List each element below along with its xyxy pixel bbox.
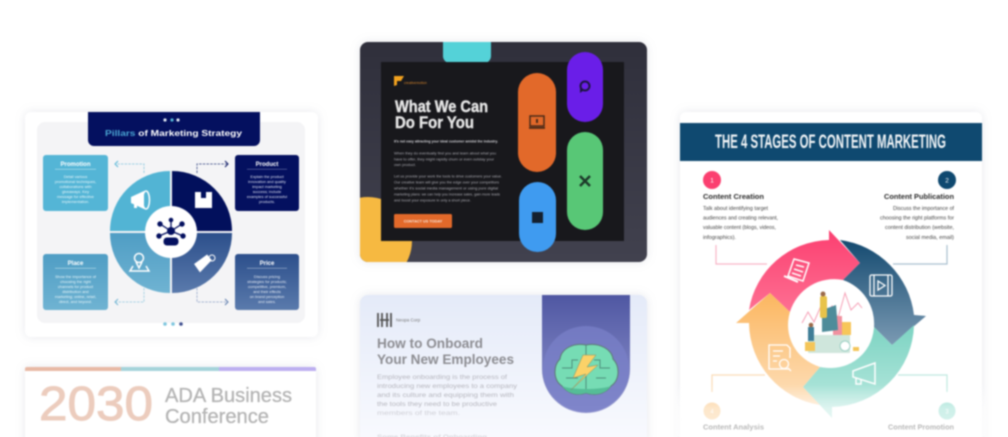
stage 2 text: 2 <box>945 178 949 184</box>
body copy: marketing plans: we can help you increase sales, gain more leads <box>394 192 500 196</box>
dark card background <box>360 42 647 262</box>
body copy <box>394 140 502 202</box>
body text: the tools they need to be productive <box>377 401 498 408</box>
card background <box>25 112 318 337</box>
icon: box <box>195 192 212 208</box>
arrow: price connector <box>197 288 228 305</box>
stage 2 text <box>880 171 956 241</box>
box: price: Price <box>260 261 275 267</box>
stage 2 text: choosing the right platforms for <box>880 216 954 222</box>
body text: members of the team. <box>377 410 460 417</box>
arrow: promotion connector <box>115 161 144 173</box>
body copy: have to offer, they might rapidly churn or even outstay your <box>394 158 495 162</box>
stage 1 text <box>703 171 778 241</box>
icon: network hub <box>157 218 185 245</box>
panel: the 4 stages of content marketing <box>676 112 986 437</box>
heading: Your New Employees <box>377 351 514 367</box>
body copy: Our creative team will give you the edge over your competitors <box>394 180 499 184</box>
box: price: and sales. <box>258 299 276 304</box>
heading <box>377 335 514 367</box>
stage 3 text: 3 <box>945 410 949 416</box>
stage 2 text: content distribution (website, <box>885 225 954 231</box>
connector: stage 4 <box>712 375 765 392</box>
stage 1 text: Content Creation <box>703 192 764 201</box>
stage 2 text: Content Publication <box>884 192 954 201</box>
arrow: content promotion <box>803 325 914 418</box>
logo <box>394 76 427 86</box>
body text: introducing new employees to a company <box>377 383 518 390</box>
body copy: own product. <box>394 163 416 167</box>
stage 4 text: Content Analysis <box>703 424 764 432</box>
heading: What We Can <box>395 98 488 116</box>
box: product: examples of successful <box>247 194 287 199</box>
card background <box>360 295 647 437</box>
box: product <box>235 155 299 211</box>
panel: what we can do for you <box>358 40 649 264</box>
conference title: Conference <box>165 406 269 428</box>
year: 2030 <box>39 378 153 431</box>
shield banner with brain <box>542 295 630 413</box>
box: product: innovation and quality <box>248 179 286 184</box>
tri-colour top bar <box>25 367 316 371</box>
body copy: Let us provide your work the tools to drive customers your value. <box>394 174 502 178</box>
panel: how to onboard your new employees <box>360 295 647 437</box>
orange pill with laptop icon <box>518 73 556 172</box>
heading: Do For You <box>395 114 474 132</box>
centre illustration <box>788 282 874 368</box>
stage 4 text: 4 <box>710 410 714 416</box>
stage 3 text <box>888 402 956 432</box>
stage 2 text: social media, email) <box>906 235 954 241</box>
arrow: content analysis <box>736 293 820 405</box>
inner dark panel <box>381 62 624 241</box>
box: price <box>235 254 299 310</box>
box: place: direct, and beyond. <box>59 299 92 304</box>
connector: stage 2 <box>893 245 947 264</box>
conference title: ADA Business <box>165 385 292 407</box>
icon: megaphone <box>131 191 150 209</box>
white card <box>680 112 982 437</box>
wheel diagram <box>110 171 232 293</box>
icon: document <box>784 259 809 282</box>
heading <box>395 98 488 132</box>
icon: location pin <box>130 254 149 271</box>
title banner <box>680 123 982 161</box>
blue pill with square icon <box>519 182 556 252</box>
heading: How to Onboard <box>377 335 483 351</box>
stage 1 text: valuable content (blogs, videos, <box>703 225 776 231</box>
inner grey panel <box>37 122 305 323</box>
button: contact us today: CONTACT US TODAY <box>404 220 443 224</box>
logo: creativemotion <box>404 81 427 85</box>
body copy: and boost your exposure in only a short piece. <box>394 198 471 202</box>
box: promotion: Detail various <box>64 174 87 179</box>
conference title <box>165 385 292 428</box>
arrow: place connector <box>115 288 144 305</box>
pagination dots <box>163 322 183 326</box>
panel: pillars of marketing strategy <box>25 112 318 337</box>
box: place: choosing the right <box>60 279 92 284</box>
icon: brain <box>555 344 618 394</box>
icon: video frame <box>870 275 892 296</box>
box: promotion: collaborations with <box>59 184 92 189</box>
bottom fade over stages 3 and 4 <box>676 385 986 437</box>
box: price: on brand perception <box>250 294 284 299</box>
body copy: It's not easy attracting your ideal customer amidst the industry. <box>394 140 498 144</box>
box: place: Place <box>68 261 84 267</box>
body text <box>377 374 518 437</box>
stage 1 text: infographics). <box>703 235 736 241</box>
box: place: distribution and <box>62 289 89 294</box>
box: place: marketing; online, retail, <box>55 294 96 299</box>
card background <box>25 367 316 437</box>
connector: stage 3 <box>898 375 947 392</box>
box: promotion: giveaways. Key <box>62 189 89 194</box>
stage 4 text <box>703 402 764 432</box>
body text: Employee onboarding is the process of <box>377 374 507 381</box>
body text: and its culture and equipping them with <box>377 392 515 399</box>
arrow: product connector <box>197 161 228 173</box>
yellow circle and teal tab <box>359 41 492 263</box>
box: promotion: implementation. <box>62 199 89 204</box>
purple pill with chat icon <box>567 52 603 122</box>
box: product: Explain the product <box>250 174 285 179</box>
body copy: whether it's social media management or using pure digital <box>394 186 498 190</box>
icon: megaphone outline <box>853 363 875 384</box>
icon: lightning bolt <box>571 355 598 390</box>
icon: report with magnifier <box>769 345 791 371</box>
stage 2 text: Discuss the importance of <box>893 206 954 212</box>
box: product: products. <box>259 199 275 204</box>
box: product: success; include <box>253 189 281 194</box>
connector: stage 1 <box>716 245 767 264</box>
panel: ADA business conference <box>25 367 316 437</box>
box: price: Discuss pricing <box>254 274 280 279</box>
box: promotion <box>43 155 108 211</box>
box: price: competitive, premium, <box>248 284 286 289</box>
heading banner <box>88 112 260 146</box>
box: price: and their effects <box>253 289 281 294</box>
box: product: impact marketing <box>252 184 282 189</box>
green pill with cross icon <box>567 132 603 230</box>
icon: price tag <box>193 254 215 273</box>
logo: Neopa Corp <box>378 313 421 327</box>
box: product: Product <box>256 162 278 168</box>
stage 1 text: audiences and creating relevant, <box>703 216 778 222</box>
logo: Neopa Corp: Neopa Corp <box>396 318 421 322</box>
button: contact us today <box>394 214 452 228</box>
heading banner: Pillars of Marketing Strategy <box>105 128 242 138</box>
box: price: strategies for products; <box>247 279 287 284</box>
stage 3 text: Content Promotion <box>888 424 954 432</box>
stage 1 text: Talk about identifying target <box>703 206 768 212</box>
body copy: When they do eventually find you and learn about what you <box>394 152 496 156</box>
box: promotion: promotional techniques, <box>55 179 96 184</box>
box: place <box>43 254 108 310</box>
box: promotion: message for effective <box>57 194 94 199</box>
box: place: channels for product <box>58 284 94 289</box>
stage 1 text: 1 <box>710 178 714 184</box>
box: place: Show the importance of <box>55 274 97 279</box>
arrow: content creation <box>749 230 860 312</box>
box: promotion: Promotion <box>60 162 91 168</box>
arrow: content publication <box>840 240 926 345</box>
cycle diagram <box>736 230 926 418</box>
